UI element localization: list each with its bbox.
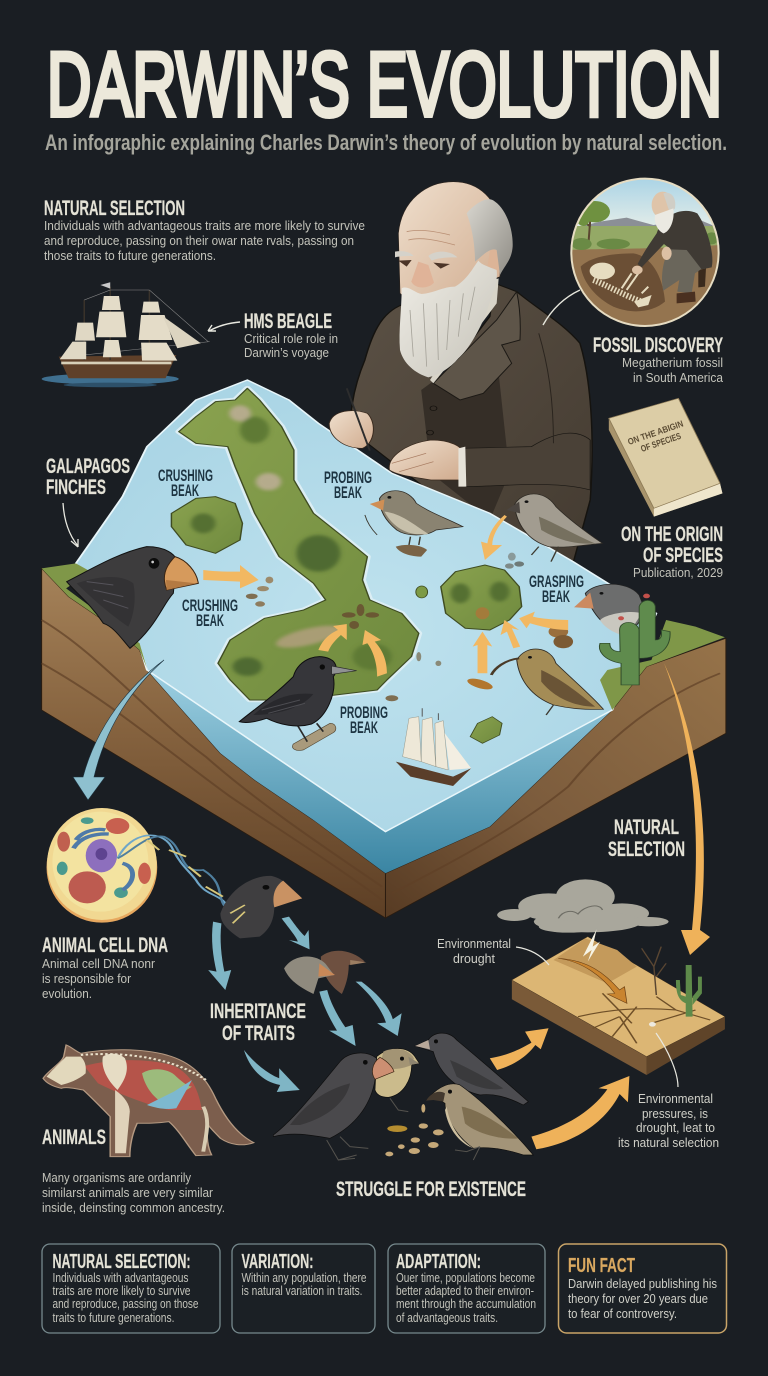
panel: adaptation definition: ment through the accumulation xyxy=(396,1296,536,1311)
kneeling man xyxy=(698,268,706,287)
map labels: BEAK xyxy=(542,587,570,606)
beard strands xyxy=(410,287,475,367)
seeds xyxy=(265,577,273,583)
map labels: BEAK xyxy=(196,611,224,630)
black finch on log xyxy=(239,657,357,750)
top right finch xyxy=(506,494,602,562)
panel: variation definition: VARIATION: xyxy=(242,1251,314,1273)
seeds on main island xyxy=(342,604,379,629)
text block: animal cell DNA: ANIMAL CELL DNA xyxy=(42,934,168,957)
illustration: struggle finches group xyxy=(273,1033,533,1160)
cloud xyxy=(497,879,669,933)
dead tree xyxy=(642,947,666,995)
text block: HMS Beagle xyxy=(244,310,338,360)
map: Galapagos island block xyxy=(42,380,726,918)
hair xyxy=(467,199,513,275)
waistcoat xyxy=(421,337,509,520)
text block: fossil discovery: in South America xyxy=(633,370,724,385)
arrow: teal, map to cell xyxy=(73,660,164,800)
ear xyxy=(487,249,499,275)
illustration: animal anatomy xyxy=(43,1045,254,1157)
small island xyxy=(470,717,502,743)
beard xyxy=(400,261,497,377)
coat xyxy=(350,283,592,563)
cactus xyxy=(676,965,702,1017)
nuts near grasping xyxy=(549,626,568,638)
panel: natural selection definition xyxy=(42,1244,220,1333)
water front xyxy=(147,670,612,873)
head xyxy=(398,182,502,310)
panel: natural selection definition: and reproduce, passing on those xyxy=(52,1296,198,1311)
text block: inheritance of traits xyxy=(210,1000,306,1045)
earth strata right xyxy=(392,673,720,893)
panel: fun fact: FUN FACT xyxy=(568,1255,635,1277)
left land xyxy=(42,563,147,668)
arrow: orange, map to drought xyxy=(664,663,710,955)
brown curved-beak finch xyxy=(491,649,603,715)
text block: animal cell DNA: is responsible for xyxy=(42,971,132,986)
panel: adaptation definition: better adapted to their environ- xyxy=(396,1283,534,1298)
legs xyxy=(327,1098,480,1160)
text block: fossil discovery: Megatherium fossil xyxy=(622,355,723,370)
text block: natural selection xyxy=(44,197,365,263)
illustration: on the origin of species book: OF SPECIES xyxy=(639,431,682,454)
cactus xyxy=(599,594,670,685)
text block: HMS Beagle: Critical role role in xyxy=(244,331,338,346)
right island xyxy=(441,565,522,630)
top probing finch xyxy=(365,491,463,557)
map labels: CRUSHING xyxy=(158,466,213,485)
callout line: drought xyxy=(516,947,549,965)
panel: natural selection definition: NATURAL SELECTION: xyxy=(52,1251,190,1273)
forehead wrinkles xyxy=(407,230,455,245)
text block: inheritance of traits: OF TRAITS xyxy=(222,1022,295,1045)
insect xyxy=(465,676,495,692)
text block: Galapagos finches: FINCHES xyxy=(46,476,106,499)
text block: animals xyxy=(42,1126,225,1215)
panel: fun fact: Darwin delayed publishing his xyxy=(568,1276,717,1291)
text block: on the origin of species xyxy=(621,523,723,580)
map labels: CRUSHING xyxy=(182,596,238,615)
grasping finch xyxy=(574,584,647,637)
panel: fun fact: to fear of controversy. xyxy=(568,1306,677,1321)
text block: HMS Beagle: HMS BEAGLE xyxy=(244,310,332,333)
illustration: drought block with cloud xyxy=(497,879,725,1075)
text block: on the origin of species: Publication, 2029 xyxy=(633,565,723,580)
crushing beak island xyxy=(171,497,242,553)
text block: environmental pressures: its natural selection xyxy=(618,1135,719,1150)
text block: animals: Many organisms are ordanrily xyxy=(42,1170,191,1185)
DNA strand xyxy=(118,835,242,935)
water surface xyxy=(76,380,656,832)
cracks xyxy=(578,993,710,1043)
finch heads pair xyxy=(284,951,366,994)
text block: natural selection: Individuals with advantageous traits are more likely to survive xyxy=(44,218,365,233)
earth left face xyxy=(42,568,385,918)
illustration: animal cell and DNA xyxy=(47,808,242,935)
panel: variation definition: Within any population, there xyxy=(242,1270,366,1285)
text block: natural selection: those traits to future generations. xyxy=(44,248,216,263)
large black finch xyxy=(67,547,198,648)
main island xyxy=(179,388,419,700)
text block: animal cell DNA: Animal cell DNA nonr xyxy=(42,956,156,971)
panel: variation definition: is natural variation in traits. xyxy=(242,1283,362,1298)
earth right face xyxy=(385,638,726,918)
panel: fun fact xyxy=(558,1244,726,1333)
sleeve crease xyxy=(539,333,553,443)
illustration: on the origin of species book: ON THE ABIGIN xyxy=(626,419,684,447)
text block: animal cell DNA xyxy=(42,934,168,1001)
black finch front xyxy=(273,1053,377,1138)
panel: natural selection definition: traits to future generations. xyxy=(52,1310,174,1325)
text block: on the origin of species: OF SPECIES xyxy=(643,544,723,567)
earth strata left xyxy=(42,620,382,900)
illustration: on the origin of species book xyxy=(609,398,722,517)
panel: variation definition xyxy=(232,1244,375,1333)
hands of Darwin xyxy=(329,388,466,487)
text block: HMS Beagle: Darwin’s voyage xyxy=(244,345,329,360)
panel: adaptation definition: ADAPTATION: xyxy=(396,1251,481,1273)
map labels: GRASPING xyxy=(529,572,584,591)
text block: environmental drought xyxy=(437,936,511,966)
brown finch xyxy=(427,1084,533,1155)
lightning xyxy=(583,929,600,962)
teal arrows: inheritance xyxy=(208,917,402,1092)
main island foam xyxy=(179,388,419,700)
text block: animal cell DNA: evolution. xyxy=(42,986,92,1001)
text block: environmental pressures xyxy=(618,1091,719,1150)
text block: animals: ANIMALS xyxy=(42,1126,106,1149)
callout line: pressures xyxy=(656,1033,678,1087)
text block: inheritance of traits: INHERITANCE xyxy=(210,1000,306,1023)
text block: natural selection label: NATURAL xyxy=(614,816,679,839)
map labels: BEAK xyxy=(350,718,378,737)
text block: natural selection label: SELECTION xyxy=(608,838,685,861)
illustration: HMS Beagle ship xyxy=(42,282,210,387)
map labels: PROBING xyxy=(340,703,388,722)
eyebrows xyxy=(395,251,457,261)
island patches xyxy=(229,405,392,676)
illustration: Charles Darwin xyxy=(350,182,592,563)
map labels: PROBING xyxy=(324,468,372,487)
panel: fun fact: theory for over 20 years due xyxy=(568,1291,708,1306)
sleeve xyxy=(463,433,590,490)
illustration: finch head with DNA xyxy=(220,876,302,938)
block sides xyxy=(512,980,647,1075)
text block: Galapagos finches xyxy=(46,455,130,499)
text block: animals: inside, deinsting common ancestry. xyxy=(42,1200,225,1215)
text block: natural selection: and reproduce, passing on their owar nate rvals, passing on xyxy=(44,233,354,248)
map labels xyxy=(158,466,584,737)
text block: animals: similarst animals are very similar xyxy=(42,1185,214,1200)
arrow: to finches xyxy=(63,503,78,547)
panel: natural selection definition: traits are more likely to survive xyxy=(52,1283,190,1298)
panel: adaptation definition: Ouer time, populations become xyxy=(396,1270,535,1285)
lapel xyxy=(433,292,520,400)
map labels: BEAK xyxy=(171,481,199,500)
drought arrow xyxy=(558,958,627,1003)
collar xyxy=(430,278,499,383)
orange arrows: to drought xyxy=(490,1028,629,1149)
dark finch back xyxy=(415,1033,528,1105)
seeds xyxy=(385,1104,444,1156)
text block: environmental pressures: pressures, is xyxy=(642,1106,708,1121)
text block: natural selection: NATURAL SELECTION xyxy=(44,197,185,220)
buttons xyxy=(430,406,437,411)
text block: environmental drought: drought xyxy=(453,951,495,966)
tan finch xyxy=(375,1049,419,1097)
arrow: to HMS Beagle xyxy=(208,322,240,331)
text block: fossil discovery xyxy=(593,334,724,385)
block top xyxy=(512,937,725,1057)
panel: adaptation definition xyxy=(388,1244,545,1333)
nose xyxy=(411,262,434,288)
text block: environmental pressures: Environmental xyxy=(638,1091,713,1106)
panel: adaptation definition: of advantageous traits. xyxy=(396,1310,498,1325)
panel: natural selection definition: Individuals with advantageous xyxy=(52,1270,189,1285)
eyes xyxy=(398,260,450,269)
yellow arrows xyxy=(203,515,568,677)
map labels: BEAK xyxy=(334,483,362,502)
text block: Galapagos finches: GALAPAGOS xyxy=(46,455,130,478)
illustration: fossil discovery xyxy=(570,177,720,330)
callout line: fossil xyxy=(543,290,580,325)
small ship xyxy=(396,708,471,786)
text block: environmental pressures: drought, leat to xyxy=(636,1120,715,1135)
text block: environmental drought: Environmental xyxy=(437,936,511,951)
text block: struggle for existence: STRUGGLE FOR EXISTENCE xyxy=(336,1178,526,1201)
fossil skeleton xyxy=(590,263,615,279)
right land xyxy=(600,620,725,710)
text block: natural selection label xyxy=(608,816,685,861)
